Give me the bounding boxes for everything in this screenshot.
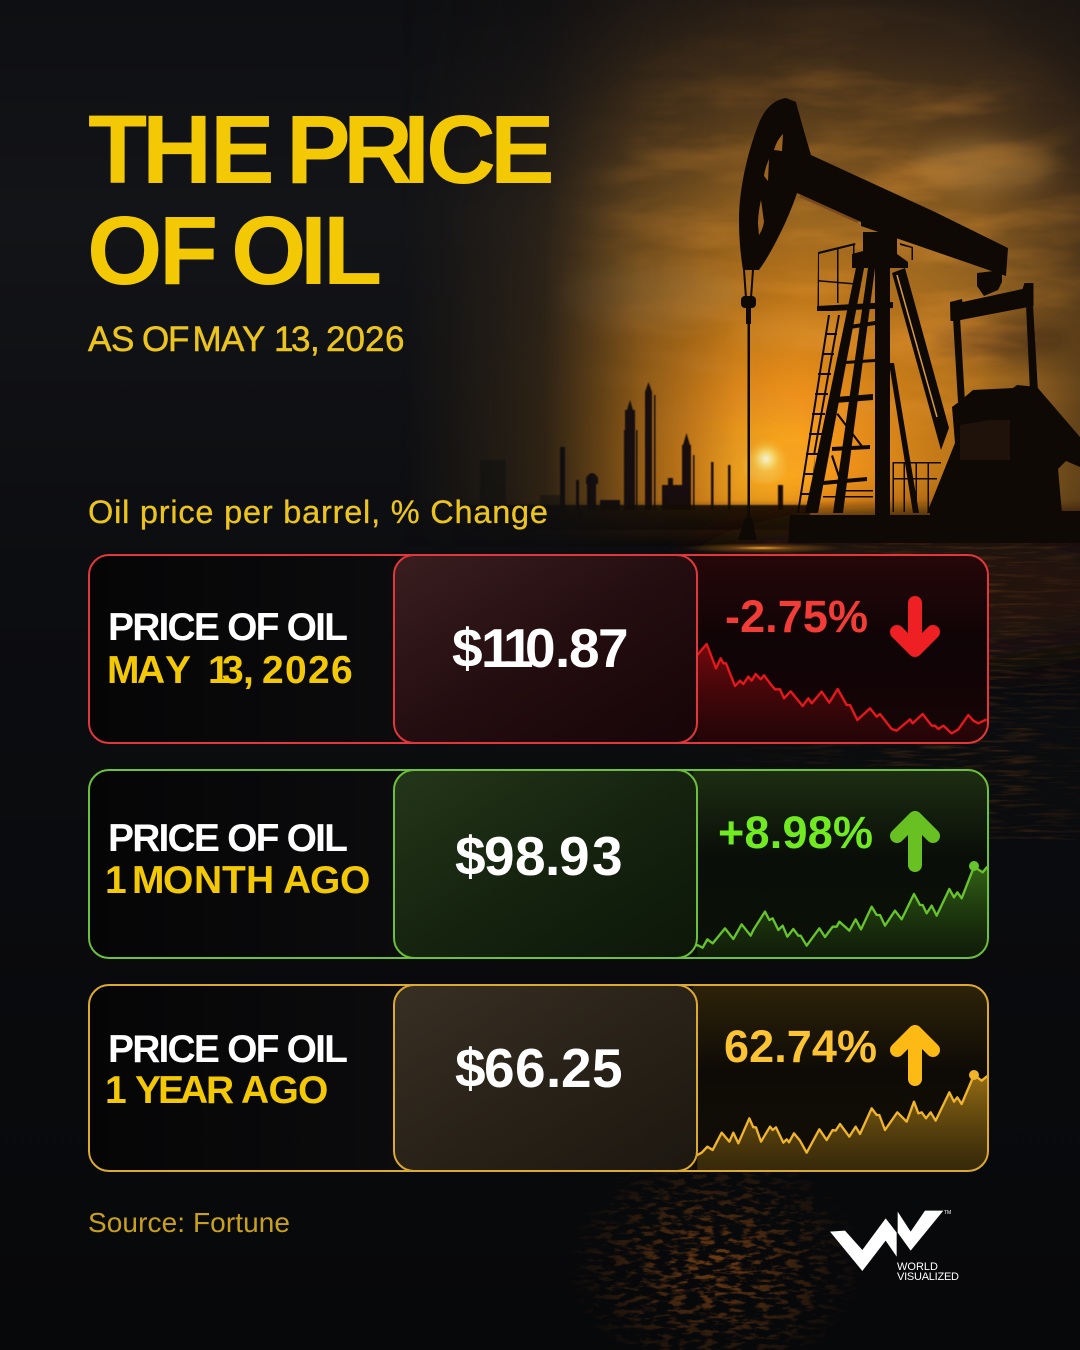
card outline	[89, 985, 988, 1171]
wordmark: WORLD	[897, 1261, 938, 1273]
sparkline rising	[697, 1070, 987, 1170]
title	[87, 95, 555, 305]
pump base	[788, 511, 1080, 543]
clouds	[480, 0, 1080, 480]
percent change: +8.98%	[718, 807, 873, 858]
railing	[818, 243, 856, 307]
right dark fade	[996, 60, 1080, 511]
wordmark	[897, 1210, 959, 1283]
card base	[89, 770, 988, 958]
bridle and polished rod	[738, 270, 757, 540]
top dark fade	[562, 0, 1080, 192]
gearbox and crank	[927, 385, 1080, 513]
icon: up arrow	[897, 1032, 933, 1079]
price value: $66.25	[455, 1037, 623, 1099]
wordmark: VISUALIZED	[897, 1271, 959, 1283]
title: OF OIL	[87, 196, 382, 305]
change panel	[693, 985, 989, 1180]
price value: $110.87	[452, 617, 629, 679]
logo: World Visualized	[830, 1210, 959, 1283]
row label: 1 YEAR AGO	[105, 1069, 328, 1112]
card outline	[89, 555, 988, 743]
price panel	[394, 770, 697, 958]
row label	[105, 817, 370, 902]
row label	[107, 606, 353, 692]
panel: one month ago, green	[89, 770, 989, 965]
source note: Source: Fortune	[88, 1207, 290, 1238]
fence	[892, 462, 941, 512]
sun	[751, 442, 780, 478]
price panel	[394, 555, 697, 743]
saddle and frame	[805, 232, 949, 517]
title: THE PRICE	[88, 95, 555, 204]
row label: 1 MONTH AGO	[105, 859, 370, 902]
row label	[105, 1028, 348, 1112]
refinery silhouette	[470, 382, 810, 530]
horse head and beam	[739, 98, 1008, 276]
percent change: 62.74%	[724, 1021, 877, 1072]
pump jack silhouette	[738, 98, 1080, 543]
sparkline falling	[693, 644, 987, 750]
equalizer crossbar and pitman arms	[950, 270, 1038, 402]
row label: PRICE OF OIL	[108, 606, 348, 649]
price panel	[394, 985, 697, 1171]
icon: down arrow	[897, 603, 933, 650]
platform	[817, 302, 893, 311]
sunset sky	[448, 0, 1080, 538]
sunset scene fading into the dark left side	[448, 0, 1080, 540]
icon: up arrow	[897, 818, 933, 865]
ground band	[448, 501, 1080, 545]
panel: one year ago, gold	[89, 985, 989, 1180]
change panel	[693, 770, 989, 965]
card outline	[89, 770, 988, 958]
subtitle date: AS OF MAY 13, 2026	[88, 320, 404, 359]
panel: current price, red	[89, 555, 989, 750]
ladder	[797, 315, 840, 513]
chart caption: Oil price per barrel, % Change	[88, 494, 548, 530]
water ripples	[400, 540, 1080, 1350]
row label: MAY 13, 2026	[107, 649, 353, 692]
row label: PRICE OF OIL	[108, 1028, 348, 1071]
price value: $98.93	[455, 825, 623, 887]
card base	[89, 985, 988, 1171]
row label: PRICE OF OIL	[108, 817, 348, 860]
card base	[89, 555, 988, 743]
right side water glow	[680, 520, 1080, 660]
change panel	[693, 555, 989, 750]
icon: W mark	[830, 1211, 943, 1271]
sparkline rising	[693, 861, 987, 965]
percent change: -2.75%	[725, 591, 868, 642]
horizon reflection	[682, 543, 842, 553]
wordmark: TM	[944, 1210, 951, 1216]
